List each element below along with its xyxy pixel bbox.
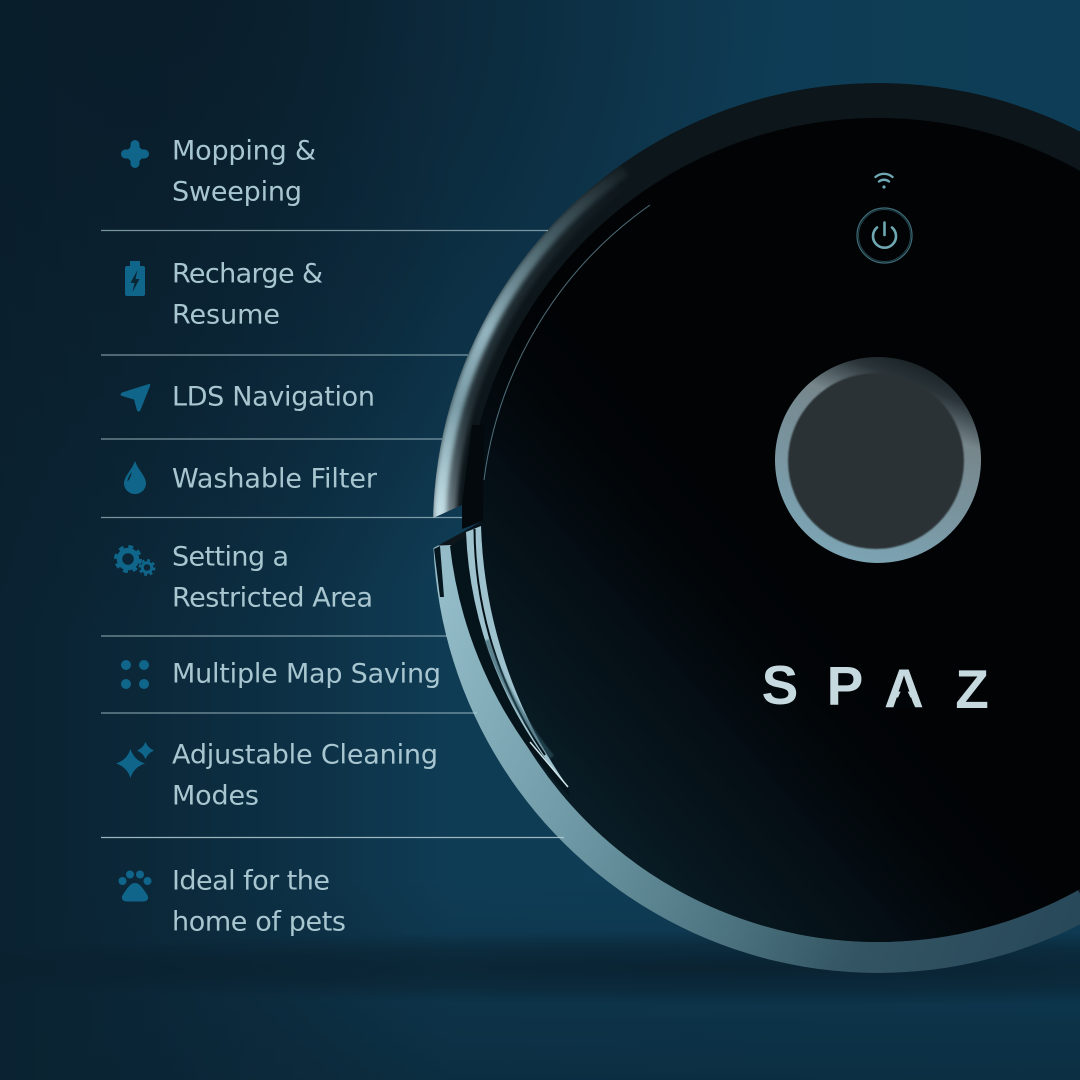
text: Recharge & (172, 258, 323, 290)
text: Adjustable Cleaning (172, 740, 438, 770)
icon: power button (857, 208, 912, 263)
icon: cross (121, 140, 149, 168)
text: home of pets (172, 906, 346, 938)
icon: gears (116, 547, 154, 575)
text (172, 542, 373, 614)
icon: four dots (121, 660, 149, 689)
feature: washable filter (124, 461, 378, 494)
text (172, 136, 316, 208)
text: Resume (172, 300, 280, 330)
text (172, 740, 438, 812)
dividers (101, 230, 564, 838)
feature: LDS navigation (120, 382, 375, 412)
text (172, 258, 323, 330)
text (172, 866, 346, 938)
icon: battery (125, 261, 145, 296)
text: Washable Filter (172, 464, 378, 494)
text: Ideal for the (172, 866, 330, 896)
feature: mopping and sweeping (121, 136, 316, 208)
text: Restricted Area (172, 582, 373, 614)
feature: restricted area (116, 542, 373, 614)
icon: sparkles (116, 742, 154, 778)
text: Mopping & (172, 136, 316, 166)
icon: navigation arrow (120, 384, 150, 412)
feature: recharge and resume (125, 258, 323, 330)
text: Modes (172, 780, 259, 812)
text: Sweeping (172, 176, 302, 208)
icon: paw (118, 870, 152, 902)
text: Setting a (172, 542, 289, 572)
lower left bands (434, 526, 570, 797)
logo: SPAZ (762, 654, 989, 720)
text: LDS Navigation (172, 382, 375, 412)
feature: adjustable cleaning modes (116, 740, 438, 812)
icon: water drop (124, 461, 146, 494)
text: Multiple Map Saving (172, 658, 441, 690)
icon: wifi (876, 174, 892, 189)
robot vacuum (433, 83, 1080, 973)
feature: ideal for pets (118, 866, 346, 938)
feature: multiple map saving (121, 658, 441, 690)
centre sensor dial (775, 357, 981, 563)
notch dark piece (462, 425, 484, 529)
robot body (433, 83, 1080, 973)
